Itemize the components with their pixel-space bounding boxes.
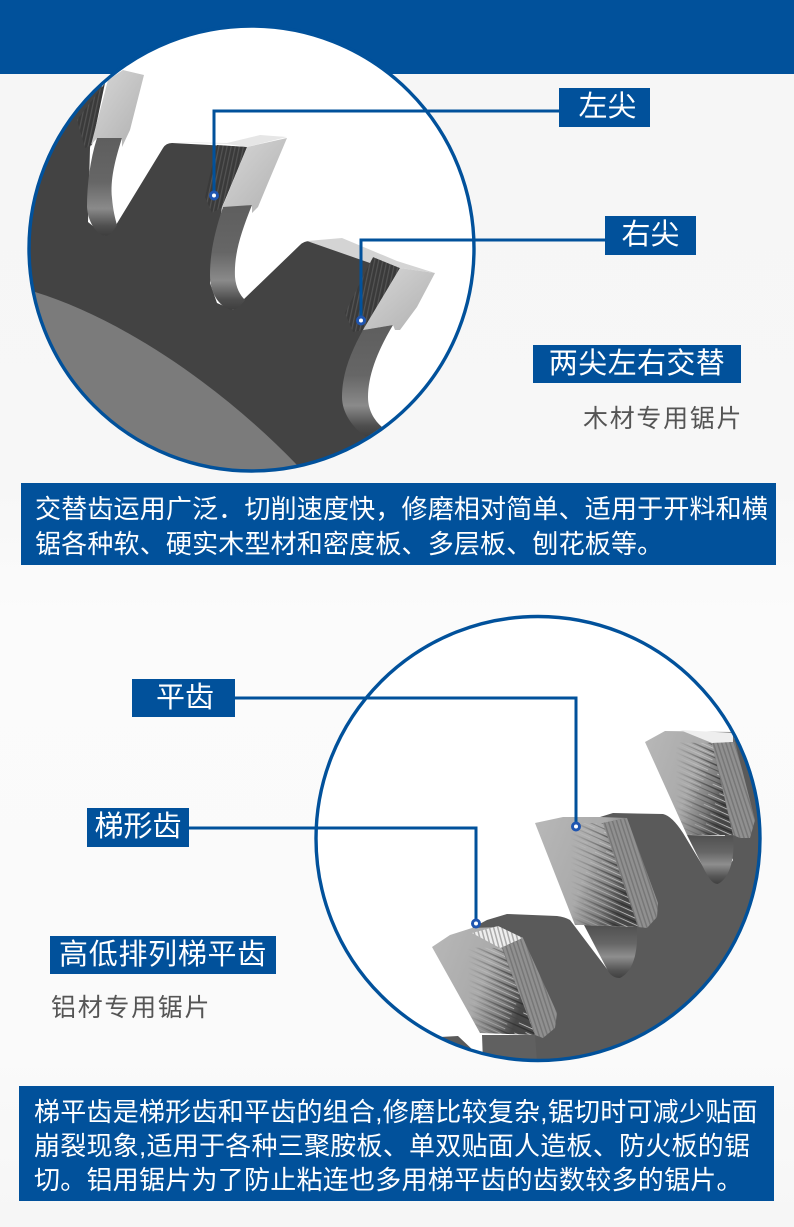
text block: alternating tooth description xyxy=(21,483,776,565)
heading: high-low trapezoid flat tooth: 高低排列梯平齿 xyxy=(59,939,267,971)
subheading: aluminum saw blade: 铝材专用锯片 xyxy=(51,994,211,1022)
text block: trapezoid flat tooth description: 崩裂现象,适用于各种三聚胺板、单双贴面人造板、防火板的锯 xyxy=(34,1131,750,1161)
label: trapezoid tooth xyxy=(87,808,189,847)
tooth 1 xyxy=(77,70,144,236)
label: left tip xyxy=(559,88,650,127)
heading: alternating two tips: 两尖左右交替 xyxy=(549,348,725,380)
text block: trapezoid flat tooth description: 梯平齿是梯形齿和平齿的组合,修磨比较复杂,锯切时可减少贴面 xyxy=(34,1097,758,1127)
top banner xyxy=(0,0,794,74)
label: right tip xyxy=(605,216,696,255)
tooth C: flat xyxy=(645,730,755,838)
label: trapezoid tooth: 梯形齿 xyxy=(94,811,182,843)
label: right tip: 右尖 xyxy=(621,219,680,251)
label: flat tooth xyxy=(132,679,235,717)
circle: alternating tooth blade close-up xyxy=(27,28,476,473)
leader: right tip xyxy=(358,240,605,324)
tooth A: trapezoid xyxy=(432,926,557,1038)
text block: alternating tooth description: 锯各种软、硬实木型材和密度板、多层板、刨花板等。 xyxy=(35,529,663,559)
tooth B: flat xyxy=(535,817,658,928)
inner disc xyxy=(35,292,296,470)
label: flat tooth: 平齿 xyxy=(156,682,214,714)
circle: trapezoid and flat tooth blade close-up xyxy=(314,614,762,1062)
leader: left tip xyxy=(210,111,559,199)
tooth 3 xyxy=(307,238,435,437)
text block: trapezoid flat tooth description xyxy=(19,1086,774,1201)
label: left tip: 左尖 xyxy=(578,91,636,123)
blade body xyxy=(30,86,400,465)
subheading: wood saw blade: 木材专用锯片 xyxy=(583,405,743,433)
leader: flat tooth xyxy=(235,698,580,830)
blade body xyxy=(472,739,758,1059)
tooth 2 xyxy=(168,135,287,310)
small lower tooth xyxy=(442,1036,472,1048)
leader: trapezoid tooth xyxy=(189,828,480,927)
gullets xyxy=(584,925,637,978)
text block: trapezoid flat tooth description: 切。铝用锯片为了防止粘连也多用梯平齿的齿数较多的锯片。 xyxy=(34,1165,743,1195)
text block: alternating tooth description: 交替齿运用广泛．切削速度快，修磨相对简单、适用于开料和横 xyxy=(35,494,768,524)
